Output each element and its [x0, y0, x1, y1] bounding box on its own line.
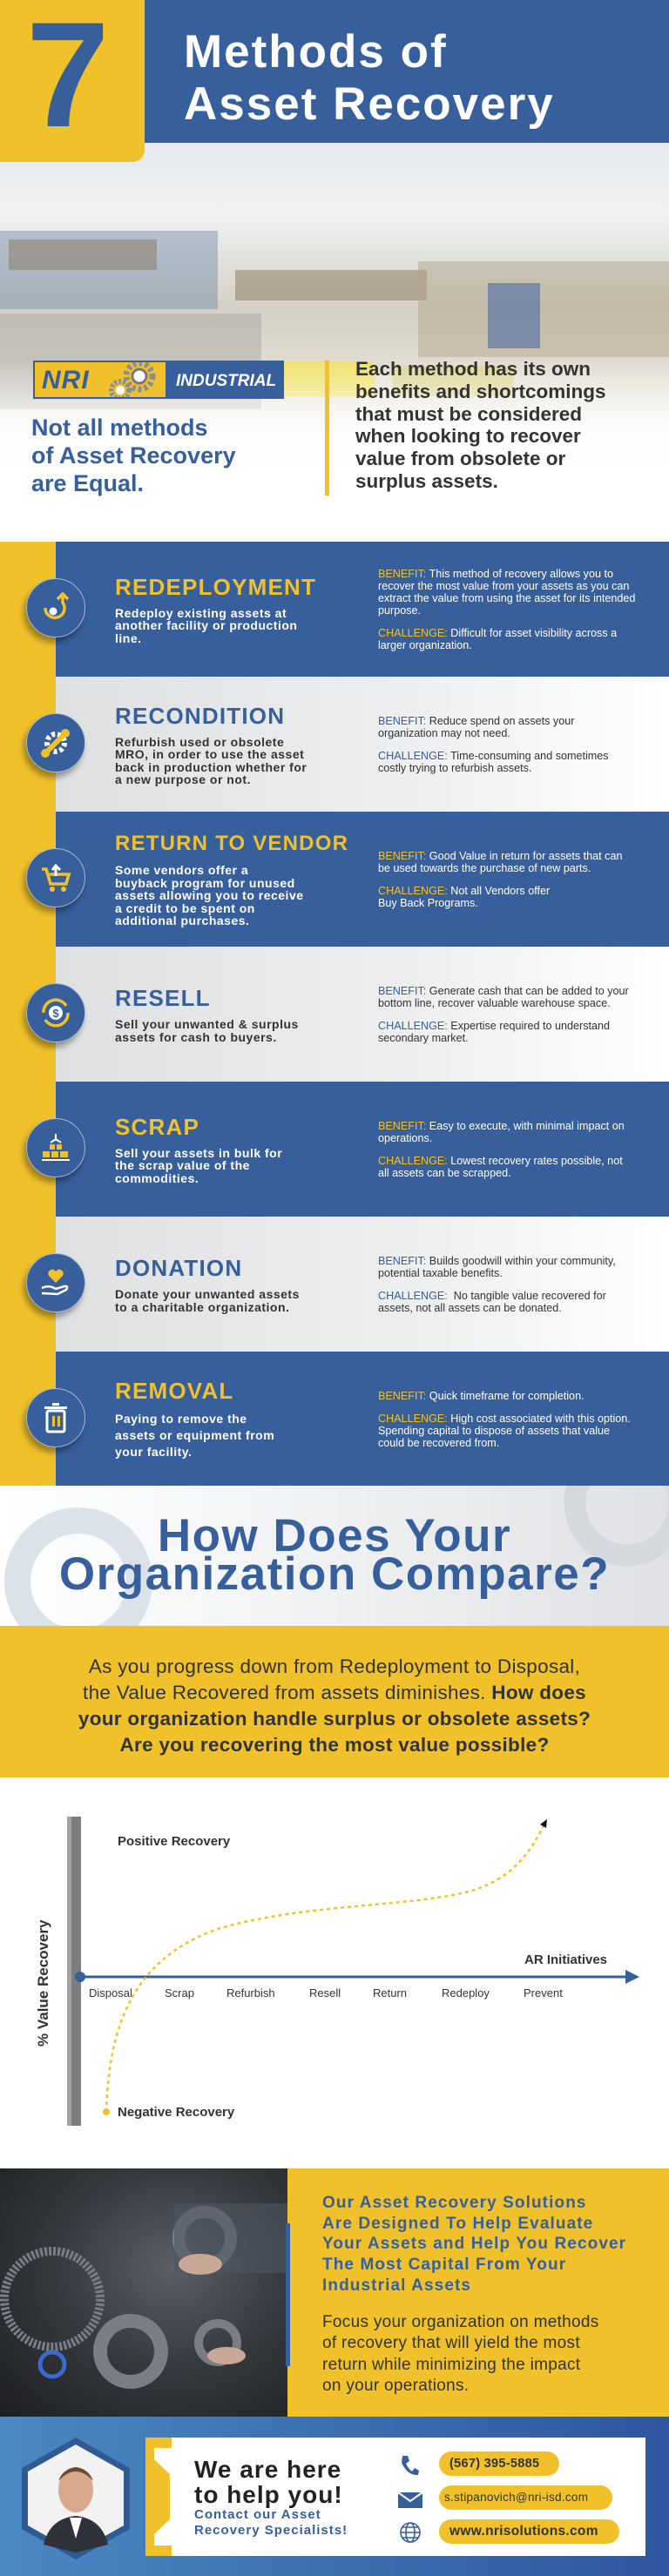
panel: redeployment: CHALLENGE: Difficult for asset visibility across a larger organization. — [378, 627, 617, 651]
panel: donation: BENEFIT: Builds goodwill within your community, potential taxable benefits. — [378, 1254, 616, 1278]
portrait hexagon — [22, 2438, 130, 2559]
intro text: benefits and shortcomings — [355, 381, 606, 402]
panel: solutions text: return while minimizing the impact — [322, 2356, 580, 2374]
panel: solutions text: Our Asset Recovery Solutions — [322, 2194, 587, 2212]
icon: email — [398, 2492, 422, 2508]
footer contact — [0, 2417, 669, 2576]
panel: scrap: BENEFIT: Easy to execute, with minimal impact on operations. — [378, 1120, 625, 1144]
tagline: not all methods: are Equal. — [31, 470, 144, 496]
icon: redeploy arrow — [26, 578, 85, 637]
intro text: when looking to recover — [355, 425, 581, 447]
heading: how does your organization compare: Organization Compare? — [59, 1548, 610, 1600]
panel: redeployment: another facility or production — [115, 618, 297, 632]
chart: value recovery curve: Resell — [309, 1986, 341, 1999]
yellow left strip — [0, 542, 56, 1486]
divider — [325, 361, 329, 496]
panel: solutions text: The Most Capital From Your — [322, 2256, 566, 2274]
panel: recondition: MRO, in order to use the asset — [115, 747, 304, 761]
panel: redeployment: Redeploy existing assets at — [115, 606, 287, 620]
panel: donation: CHALLENGE: No tangible value recovered for assets, not all assets can be donated. — [378, 1289, 606, 1313]
panel: removal: BENEFIT: Quick timeframe for completion. — [378, 1390, 585, 1402]
panel: recondition: BENEFIT: Reduce spend on assets your organization may not need. — [378, 714, 574, 738]
pill: website: www.nrisolutions.com — [449, 2524, 598, 2539]
pill: email: s.stipanovich@nri-isd.com — [444, 2491, 588, 2504]
chart: value recovery curve: % Value Recovery — [35, 1919, 51, 2047]
pill: phone: (567) 395-5885 — [449, 2457, 539, 2471]
panel: removal: CHALLENGE: High cost associated with this option. Spending capital to dispose of assets that value could be recovered from. — [378, 1413, 631, 1449]
chart: value recovery curve: Refurbish — [226, 1986, 275, 1999]
icon: globe — [400, 2522, 421, 2543]
panel: return to vendor: BENEFIT: Good Value in return for assets that can be used towards the purchase of new parts. — [378, 850, 622, 874]
panel: solutions text: on your operations. — [322, 2377, 469, 2395]
chart: value recovery curve: Return — [373, 1986, 407, 1999]
panel: scrap: Sell your assets in bulk for — [115, 1146, 282, 1160]
panel: recondition — [56, 677, 669, 812]
icon: trash bin — [26, 1388, 85, 1447]
contact card: Contact our Asset — [194, 2507, 321, 2522]
chart: value recovery curve: Positive Recovery — [118, 1834, 231, 1849]
panel: donation: to a charitable organization. — [115, 1299, 289, 1313]
panel: scrap: SCRAP — [115, 1114, 199, 1140]
icon: resell dollar: $ — [52, 1007, 59, 1020]
panel: solutions text — [287, 2168, 669, 2417]
icon: wrench gear — [26, 713, 85, 772]
yellow callout text: the Value Recovered from assets diminishes. How does — [83, 1682, 586, 1703]
intro text: that must be considered — [355, 403, 582, 425]
panel: removal: your facility. — [115, 1445, 192, 1459]
photo: gears in hands — [0, 2168, 287, 2417]
yellow callout text: As you progress down from Redeployment to Disposal, — [89, 1656, 580, 1677]
pill: email — [439, 2485, 612, 2510]
panel: recondition: RECONDITION — [115, 702, 285, 728]
intro text: surplus assets. — [355, 470, 498, 492]
chart: value recovery curve: Negative Recovery — [118, 2105, 235, 2120]
panel: resell — [56, 947, 669, 1082]
panel: resell: CHALLENGE: Expertise required to understand secondary market. — [378, 1019, 610, 1043]
panel: return to vendor — [56, 812, 669, 947]
panel: recondition: a new purpose or not. — [115, 772, 251, 786]
panel: recondition: Refurbish used or obsolete — [115, 735, 284, 749]
intro text: Each method has its own — [355, 358, 591, 380]
panel: removal — [56, 1352, 669, 1487]
logo: NRI Industrial: NRI — [42, 366, 90, 394]
panel: return to vendor: RETURN TO VENDOR — [115, 832, 348, 855]
panel: resell: Sell your unwanted & surplus — [115, 1017, 299, 1031]
panel: return to vendor: additional purchases. — [115, 914, 249, 927]
pill: website — [439, 2519, 619, 2544]
chart: value recovery curve: Disposal — [89, 1986, 132, 1999]
intro text: value from obsolete or — [355, 448, 565, 469]
panel: solutions text: Industrial Assets — [322, 2276, 471, 2295]
panel: return to vendor: Buy Back Programs. — [378, 897, 478, 909]
chart: value recovery curve: AR Initiatives — [524, 1952, 607, 1967]
header photo: warehouse — [0, 139, 669, 540]
title: Asset Recovery — [184, 78, 555, 130]
tagline: not all methods — [31, 415, 236, 496]
panel: redeployment — [56, 542, 669, 677]
panel: return to vendor: Some vendors offer a — [115, 863, 248, 877]
yellow callout text: Are you recovering the most value possible? — [119, 1734, 550, 1756]
intro text — [355, 358, 606, 492]
title — [184, 26, 555, 130]
panel: donation: DONATION — [115, 1255, 242, 1281]
tagline: not all methods: of Asset Recovery — [31, 442, 236, 469]
chart: value recovery curve: Prevent — [524, 1986, 563, 1999]
text: we are here — [194, 2456, 343, 2508]
panel: solutions text: Are Designed To Help Evaluate — [322, 2215, 593, 2233]
tagline: not all methods: Not all methods — [31, 415, 208, 441]
header title band — [0, 0, 669, 143]
panel: donation: Donate your unwanted assets — [115, 1287, 300, 1301]
panel: scrap: CHALLENGE: Lowest recovery rates possible, not all assets can be scrapped. — [378, 1155, 623, 1179]
panel: return to vendor: assets allowing you to receive — [115, 888, 304, 902]
panel: resell: assets for cash to buyers. — [115, 1029, 277, 1043]
logo: NRI Industrial — [33, 361, 284, 399]
icon: scrap boxes — [26, 1118, 85, 1177]
contact card: Recovery Specialists! — [194, 2522, 348, 2538]
heading: how does your organization compare: How Does Your — [158, 1510, 511, 1561]
icon: phone — [402, 2456, 419, 2475]
panel: scrap: commodities. — [115, 1171, 199, 1185]
chart: value recovery curve: Redeploy — [442, 1986, 490, 1999]
heading: how does your organization compare — [0, 1486, 669, 1626]
yellow callout text — [0, 1626, 669, 1777]
panel: removal: assets or equipment from — [115, 1428, 274, 1442]
pill: phone — [439, 2451, 559, 2476]
chart: value recovery curve — [35, 1817, 639, 2126]
panel: resell: RESELL — [115, 985, 211, 1011]
icon: cart — [26, 848, 85, 907]
contact card — [145, 2438, 645, 2556]
icon: donation heart hand — [26, 1253, 85, 1312]
chart: value recovery curve: Scrap — [165, 1986, 194, 1999]
panel: scrap: the scrap value of the — [115, 1158, 250, 1172]
title: Methods of — [184, 26, 448, 78]
big number 7 badge — [0, 0, 145, 162]
panel: donation — [56, 1217, 669, 1352]
logo: NRI Industrial: INDUSTRIAL — [176, 372, 276, 390]
panel: solutions text: of recovery that will yield the most — [322, 2334, 580, 2352]
panel: redeployment: BENEFIT: This method of recovery allows you to recover the most value from your assets as you can extract the value from using the asset for its intended purpose. — [378, 568, 635, 617]
panel: return to vendor: buyback program for unused — [115, 876, 295, 890]
icon: resell dollar — [26, 983, 85, 1042]
panel: removal: REMOVAL — [115, 1378, 233, 1404]
panel: return to vendor: CHALLENGE: Not all Vendors offer — [378, 885, 550, 897]
panel: return to vendor: a credit to be spent on — [115, 901, 255, 915]
panel: scrap — [56, 1082, 669, 1217]
panel: redeployment: REDEPLOYMENT — [115, 574, 316, 600]
panel: recondition: back in production whether for — [115, 759, 307, 773]
panel: resell: BENEFIT: Generate cash that can be added to your bottom line, recover valuable warehouse space. — [378, 984, 629, 1008]
yellow callout text: your organization handle surplus or obsolete assets? — [78, 1708, 591, 1730]
text: we are here: We are here — [194, 2456, 341, 2483]
panel: recondition: CHALLENGE: Time-consuming and sometimes costly trying to refurbish assets. — [378, 749, 609, 773]
panel: solutions text: Focus your organization on methods — [322, 2313, 599, 2331]
panel: solutions text: Your Assets and Help You Recover — [322, 2235, 626, 2253]
panel: redeployment: line. — [115, 631, 142, 645]
text: we are here: to help you! — [194, 2481, 343, 2508]
panel: removal: Paying to remove the — [115, 1412, 247, 1426]
